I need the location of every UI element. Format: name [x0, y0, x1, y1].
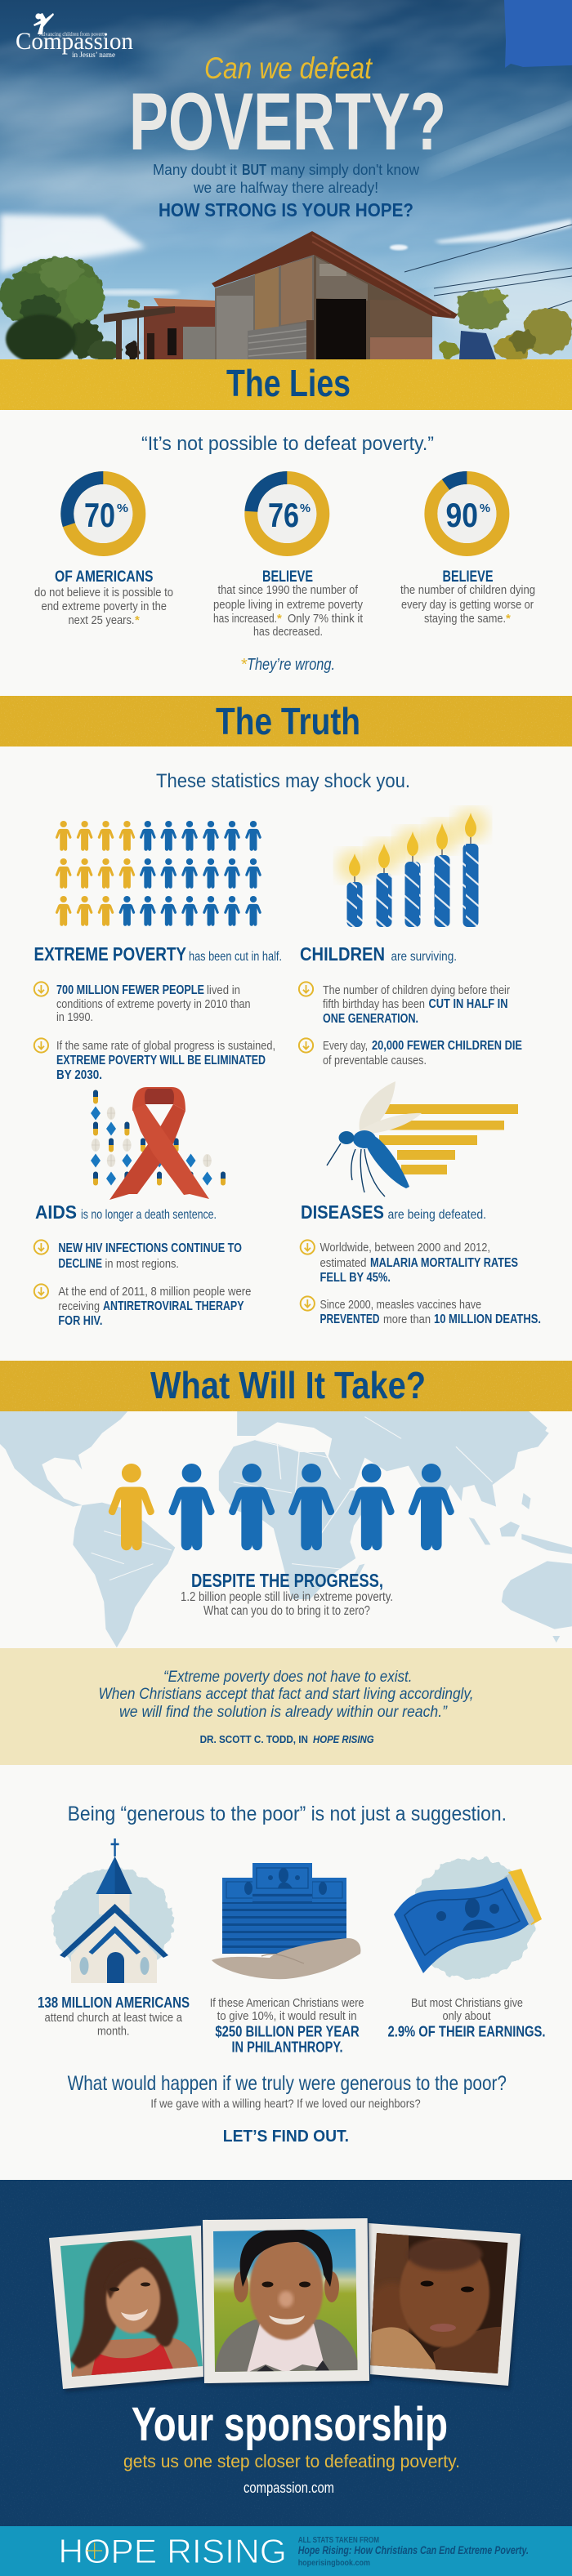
- panel: extreme poverty: [34, 943, 282, 1082]
- caption: 250 billion: $250 BILLION PER YEAR: [215, 2024, 360, 2040]
- hero title: BUT: [242, 162, 266, 178]
- hero title: many simply don't know: [270, 162, 420, 178]
- call to action: Your sponsorship: [132, 2398, 448, 2451]
- logo: Compassion: Advancing children from poverty: [39, 31, 106, 38]
- caption: 250 billion: [210, 1996, 364, 2055]
- icon: people grid: [56, 821, 261, 926]
- panel: diseases: MALARIA MORTALITY RATES: [370, 1256, 518, 1270]
- closing question: LET’S FIND OUT.: [223, 2128, 349, 2146]
- sponsorship panel background: [0, 2180, 572, 2526]
- panel: extreme poverty: lived in: [207, 983, 240, 997]
- logo: Compassion: Compassion: [16, 28, 133, 55]
- truth intro: These statistics may shock you.: [156, 770, 410, 792]
- photo: girl: [49, 2226, 208, 2392]
- stat: 90 percent: staying the same.: [424, 612, 506, 626]
- icon: red ribbon and pills: [91, 1087, 226, 1200]
- panel: children: Every day,: [323, 1039, 368, 1053]
- icon: waving banknote: [394, 1858, 542, 1979]
- stat: 76 percent: that since 1990 the number of: [217, 583, 359, 597]
- stat: 70 percent: [34, 478, 173, 627]
- shack: [212, 231, 458, 359]
- panel: diseases: DISEASES: [301, 1201, 384, 1223]
- section band: What Will It Take?: [0, 1361, 572, 1411]
- panel: extreme poverty: EXTREME POVERTY: [34, 943, 186, 965]
- stat: 70 percent: end extreme poverty in the: [41, 599, 167, 613]
- panel: aids: NEW HIV INFECTIONS CONTINUE TO: [58, 1241, 242, 1255]
- panel: aids: AIDS: [35, 1201, 77, 1223]
- panel: extreme poverty: If the same rate of global progress is sustained,: [56, 1039, 275, 1053]
- panel: extreme poverty: in 1990.: [56, 1010, 93, 1024]
- panel: aids: At the end of 2011, 8 million people were: [58, 1285, 251, 1299]
- panel: quote: [0, 1648, 572, 1765]
- call to action: [123, 2398, 460, 2496]
- call to action: gets us one step closer to defeating poverty.: [123, 2451, 460, 2471]
- caption: 250 billion: IN PHILANTHROPY.: [232, 2039, 343, 2055]
- panel: children: 20,000 FEWER CHILDREN DIE: [372, 1039, 522, 1053]
- stat: 76 percent: [213, 478, 364, 639]
- stat: 70 percent: do not believe it is possible to: [34, 586, 173, 599]
- panel: children: are surviving.: [391, 950, 457, 964]
- panel: quote: When Christians accept that fact and start living accordingly,: [98, 1686, 474, 1703]
- footer band: Hope Rising: HOPE RISING: [58, 2532, 287, 2570]
- stat: 76 percent: has decreased.: [253, 625, 323, 639]
- stat: 76 percent: has increased.: [213, 612, 277, 626]
- stat: 90 percent: [400, 478, 535, 626]
- hero title: POVERTY?: [129, 76, 446, 167]
- blue cloth: [459, 331, 496, 359]
- white clouds: [0, 214, 572, 296]
- panel: children: [299, 943, 522, 1067]
- stat: 76 percent: BELIEVE: [262, 568, 313, 586]
- hero title: Many doubt it: [153, 162, 237, 178]
- hero title: [129, 51, 446, 221]
- caption: 250 billion: to give 10%, it would result in: [217, 2009, 357, 2023]
- footnote: they're wrong: They’re wrong.: [247, 656, 335, 674]
- panel: diseases: [301, 1201, 541, 1326]
- icon: candles: [337, 809, 489, 927]
- stat: 76 percent: 76: [268, 496, 299, 534]
- logo: Compassion: [16, 13, 133, 59]
- panel: diseases: are being defeated.: [387, 1208, 486, 1222]
- caption: 2.9 percent: [387, 1996, 546, 2040]
- panel: aids: in most regions.: [105, 1257, 179, 1271]
- world map: [0, 1411, 572, 1647]
- panel: children: CHILDREN: [300, 943, 385, 965]
- section band: The Truth: The Truth: [216, 700, 360, 742]
- panel: children: ONE GENERATION.: [323, 1012, 418, 1026]
- caption: 2.9 percent: But most Christians give: [411, 1996, 523, 2010]
- stat: 90 percent: *: [506, 612, 511, 626]
- hero photo: sky and shack: [0, 0, 572, 372]
- footnote: they're wrong: *: [241, 656, 248, 674]
- caption: 138 million: [38, 1994, 190, 2039]
- call to action: compassion.com: [244, 2480, 334, 2496]
- panel: aids: DECLINE: [58, 1257, 102, 1271]
- stat: 70 percent: OF AMERICANS: [55, 568, 154, 586]
- panel: extreme poverty: has been cut in half.: [189, 950, 282, 964]
- icon: church: [52, 1838, 173, 1983]
- stat: 70 percent: next 25 years.: [69, 613, 134, 627]
- stat: 70 percent: *: [135, 613, 140, 627]
- panel: extreme poverty: BY 2030.: [56, 1068, 102, 1082]
- despite the progress: [181, 1570, 393, 1618]
- panel: children: fifth birthday has been: [323, 997, 425, 1011]
- caption: 2.9 percent: only about: [443, 2009, 491, 2023]
- heading: generous: Being “generous to the poor” is not just a suggestion.: [68, 1803, 507, 1825]
- stat: 90 percent: BELIEVE: [443, 568, 494, 586]
- icon: money stacks in hand: [212, 1863, 360, 1979]
- panel: aids: is no longer a death sentence.: [81, 1208, 217, 1222]
- panel: aids: FOR HIV.: [58, 1314, 102, 1328]
- closing question: [68, 2072, 507, 2146]
- despite the progress: 1.2 billion people still live in extreme poverty.: [181, 1590, 393, 1604]
- lie quote: “It’s not possible to defeat poverty.”: [141, 433, 434, 455]
- panel: extreme poverty: 700 MILLION FEWER PEOPLE: [56, 983, 204, 997]
- panel: extreme poverty: EXTREME POVERTY WILL BE ELIMINATED: [56, 1054, 266, 1067]
- panel: extreme poverty: conditions of extreme poverty in 2010 than: [56, 997, 250, 1011]
- panel: quote: we will find the solution is already within our reach.”: [119, 1704, 449, 1721]
- panel: children: The number of children dying before their: [323, 983, 510, 997]
- section band: The Lies: [0, 359, 572, 410]
- hero title: we are halfway there already!: [193, 180, 378, 196]
- trees right: [439, 289, 572, 359]
- icon: mosquito and bars: [327, 1081, 518, 1197]
- stat: 70 percent: 70: [84, 496, 115, 534]
- panel: diseases: Worldwide, between 2000 and 2012,: [320, 1241, 490, 1255]
- despite the progress: What can you do to bring it to zero?: [203, 1604, 370, 1618]
- stat: 90 percent: %: [480, 501, 490, 515]
- photo: boy center: [203, 2218, 371, 2386]
- panel: diseases: estimated: [320, 1256, 366, 1270]
- wires: [404, 225, 572, 310]
- panel: quote: “Extreme poverty does not have to exist.: [163, 1669, 412, 1686]
- panel: aids: [34, 1201, 251, 1328]
- panel: diseases: 10 MILLION DEATHS.: [434, 1313, 541, 1326]
- closing question: If we gave with a willing heart? If we loved our neighbors?: [150, 2097, 421, 2110]
- panel: diseases: Since 2000, measles vaccines have: [320, 1298, 481, 1312]
- bush: [6, 314, 76, 363]
- section band: What Will It Take?: What Will It Take?: [150, 1364, 426, 1406]
- section band: The Truth: [0, 696, 572, 747]
- stat: 70 percent: %: [117, 501, 128, 515]
- stat: 90 percent: 90: [446, 496, 478, 534]
- panel: diseases: PREVENTED: [320, 1313, 379, 1326]
- footer band: Hope Rising: [0, 2526, 572, 2576]
- footer band: Hope Rising: hoperisingbook.com: [298, 2559, 370, 2568]
- panel: children: of preventable causes.: [323, 1054, 427, 1067]
- panel: children: CUT IN HALF IN: [428, 997, 508, 1011]
- section band: The Lies: The Lies: [226, 362, 351, 404]
- stat: 76 percent: people living in extreme poverty: [213, 598, 363, 612]
- icon: six people: [109, 1464, 454, 1550]
- despite the progress: DESPITE THE PROGRESS,: [191, 1570, 383, 1591]
- panel: aids: ANTIRETROVIRAL THERAPY: [103, 1299, 244, 1313]
- panel: quote: HOPE RISING: [313, 1733, 374, 1745]
- panel: quote: DR. SCOTT C. TODD, IN: [200, 1733, 308, 1745]
- brick house: [104, 298, 216, 359]
- stat: 76 percent: *: [277, 612, 282, 626]
- caption: 138 million: month.: [97, 2024, 129, 2039]
- blue tape: [504, 0, 572, 68]
- stat: 76 percent: Only 7% think it: [288, 612, 364, 626]
- caption: 138 million: 138 MILLION AMERICANS: [38, 1994, 190, 2011]
- panel: diseases: more than: [383, 1313, 431, 1326]
- hero title: Can we defeat: [204, 51, 373, 85]
- stat: 90 percent: the number of children dying: [400, 583, 535, 597]
- hero title: HOW STRONG IS YOUR HOPE?: [159, 199, 413, 221]
- caption: 250 billion: If these American Christians were: [210, 1996, 364, 2010]
- stat: 90 percent: every day is getting worse or: [401, 598, 534, 612]
- panel: aids: receiving: [58, 1299, 100, 1313]
- photo: boy at right: [364, 2223, 522, 2389]
- panel: diseases: FELL BY 45%.: [320, 1271, 391, 1285]
- stat: 76 percent: %: [300, 501, 311, 515]
- footer band: Hope Rising: ALL STATS TAKEN FROM: [298, 2536, 379, 2545]
- trees left: [0, 256, 140, 362]
- caption: 138 million: attend church at least twice a: [44, 2011, 183, 2025]
- logo: Compassion: in Jesus’ name: [72, 51, 115, 59]
